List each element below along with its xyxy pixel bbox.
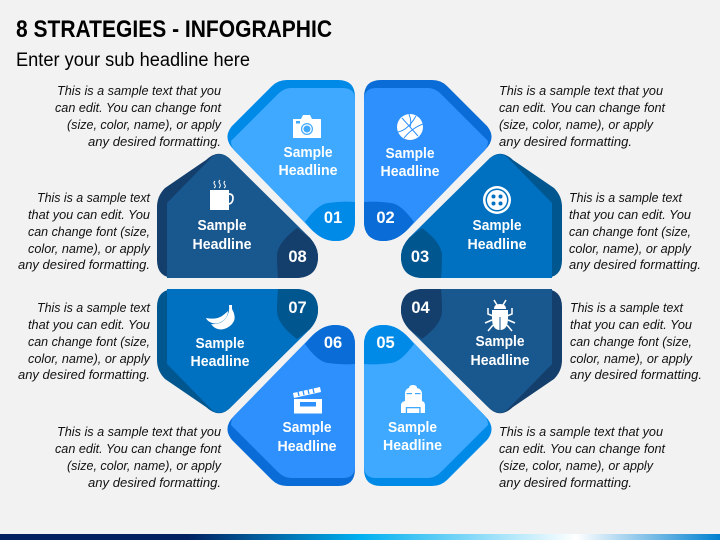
- text block: strategy 06: (size, color, name), or apply: [67, 459, 222, 473]
- icon: bug: [485, 300, 515, 331]
- number 02: 02: [376, 209, 395, 227]
- icon: coffee mug: [210, 180, 233, 210]
- text block: strategy 04: This is a sample text: [570, 301, 684, 315]
- text block: strategy 05: (size, color, name), or apply: [499, 459, 654, 473]
- text block: strategy 08: that you can edit. You: [28, 208, 150, 222]
- text block: strategy 03: any desired formatting.: [569, 258, 701, 272]
- footer gradient bar: [0, 534, 720, 540]
- panel: strategy 06: [227, 325, 355, 486]
- text block: strategy 08: any desired formatting.: [18, 258, 150, 272]
- icon: camera: [293, 115, 321, 138]
- text block: strategy 02: This is a sample text that you: [499, 84, 663, 98]
- text block: strategy 08: can change font (size,: [28, 225, 150, 239]
- headline 02: Headline: [380, 163, 440, 180]
- icon: basketball: [397, 114, 423, 140]
- number 06: 06: [324, 334, 342, 352]
- headline 06: Sample: [282, 419, 332, 436]
- text block: strategy 03: can change font (size,: [569, 225, 691, 239]
- headline 01: Sample: [284, 144, 332, 161]
- headline 06: Headline: [278, 438, 336, 455]
- number 03: 03: [411, 248, 429, 266]
- text block: strategy 07: color, name), or apply: [28, 352, 151, 366]
- headline 01: Headline: [278, 162, 338, 179]
- title: 8 STRATEGIES - INFOGRAPHIC: [16, 16, 332, 43]
- headline 07: Sample: [196, 335, 244, 352]
- text block: strategy 03: that you can edit. You: [569, 208, 691, 222]
- headline 08: Headline: [192, 236, 252, 253]
- headline 08: Sample: [198, 217, 246, 234]
- text block: strategy 05: any desired formatting.: [499, 476, 632, 490]
- panel: strategy 02: [364, 80, 492, 241]
- text block: strategy 01: any desired formatting.: [88, 135, 221, 149]
- text block: strategy 05: can edit. You can change font: [499, 442, 666, 456]
- number 08: 08: [288, 248, 307, 266]
- panel: strategy 01: [227, 80, 355, 241]
- text block: strategy 08: color, name), or apply: [28, 242, 151, 256]
- text block: strategy 06: can edit. You can change font: [55, 442, 222, 456]
- text block: strategy 07: This is a sample text: [37, 301, 151, 315]
- panel: strategy 08: [157, 154, 318, 278]
- panel: strategy 03: [401, 154, 562, 278]
- headline 03: Sample: [472, 217, 522, 234]
- text block: strategy 04: any desired formatting.: [570, 368, 702, 382]
- panel: strategy 05: [364, 325, 492, 486]
- number 04: 04: [411, 299, 430, 317]
- headline 07: Headline: [190, 353, 250, 370]
- number 05: 05: [376, 334, 395, 352]
- text block: strategy 01: (size, color, name), or apply: [67, 118, 222, 132]
- text block: strategy 03: color, name), or apply: [569, 242, 692, 256]
- headline 04: Sample: [476, 333, 524, 350]
- text block: strategy 04: that you can edit. You: [570, 318, 692, 332]
- text block: strategy 06: This is a sample text that you: [57, 425, 221, 439]
- icon: banana: [206, 305, 235, 329]
- text block: strategy 08: This is a sample text: [37, 191, 151, 205]
- icon: clapperboard: [293, 387, 322, 414]
- text block: strategy 01: This is a sample text that you: [57, 84, 221, 98]
- text block: strategy 04: can change font (size,: [570, 335, 692, 349]
- text block: strategy 04: color, name), or apply: [570, 352, 693, 366]
- headline 03: Headline: [468, 236, 526, 253]
- icon: button: [483, 186, 511, 214]
- text block: strategy 01: can edit. You can change font: [55, 101, 222, 115]
- number 07: 07: [288, 299, 307, 317]
- panel: strategy 04: [401, 289, 562, 413]
- text block: strategy 07: can change font (size,: [28, 335, 150, 349]
- text block: strategy 07: any desired formatting.: [18, 368, 150, 382]
- text block: strategy 05: This is a sample text that you: [499, 425, 663, 439]
- headline 04: Headline: [470, 352, 530, 369]
- headline 02: Sample: [386, 145, 434, 162]
- number 01: 01: [324, 209, 342, 227]
- text block: strategy 07: that you can edit. You: [28, 318, 150, 332]
- headline 05: Headline: [383, 437, 442, 454]
- text block: strategy 02: (size, color, name), or apply: [499, 118, 654, 132]
- text block: strategy 02: any desired formatting.: [499, 135, 632, 149]
- subtitle: Enter your sub headline here: [16, 50, 250, 71]
- icon: backpack: [401, 385, 425, 413]
- text block: strategy 02: can edit. You can change font: [499, 101, 666, 115]
- headline 05: Sample: [388, 419, 437, 436]
- text block: strategy 06: any desired formatting.: [88, 476, 221, 490]
- panel: strategy 07: [157, 289, 318, 413]
- text block: strategy 03: This is a sample text: [569, 191, 683, 205]
